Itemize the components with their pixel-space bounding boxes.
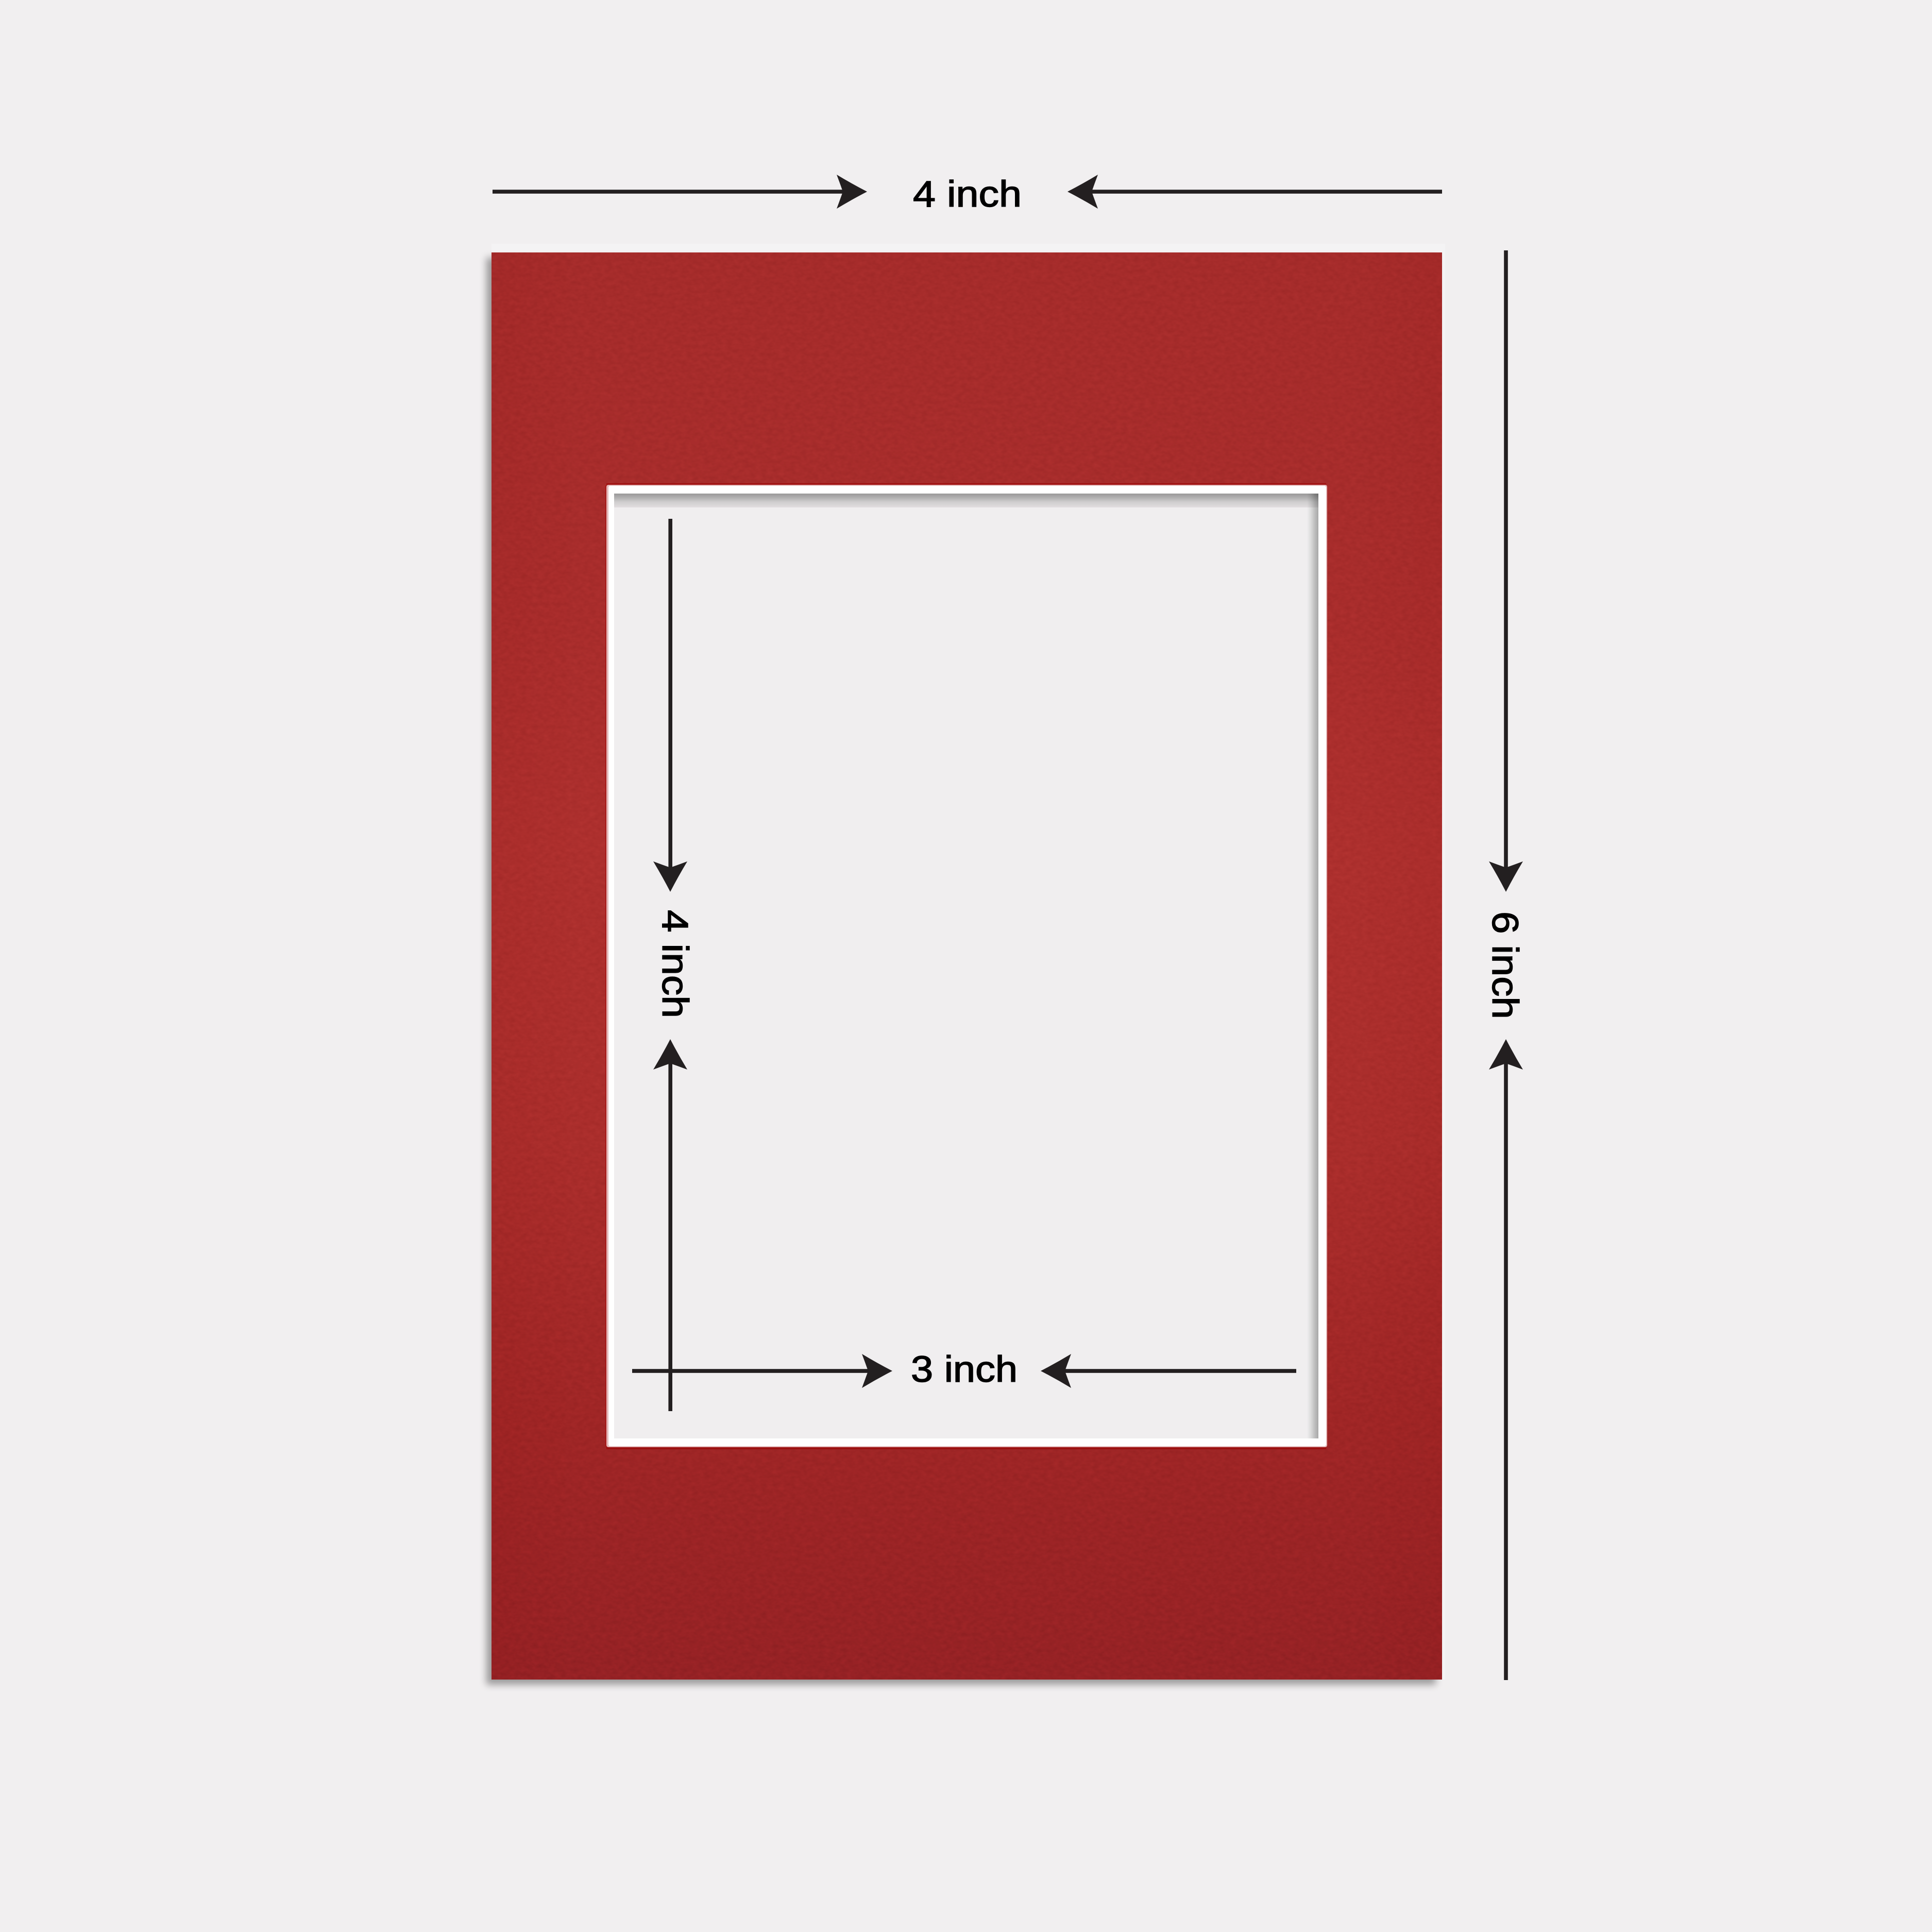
mat edge highlight	[492, 244, 1445, 1680]
arrow: inner pointing left	[1041, 1354, 1296, 1388]
label: right 6 inch: 6 inch	[1484, 911, 1525, 1019]
window top inner shadow	[614, 494, 1318, 507]
arrow: inner pointing right	[632, 1354, 892, 1388]
arrow: right side pointing up	[1489, 1039, 1523, 1680]
window opening	[614, 494, 1318, 1438]
window cut bottom dark edge	[606, 1447, 1326, 1449]
right dimension: 6 inch	[1484, 250, 1525, 1680]
arrow: inner pointing down	[653, 519, 687, 892]
window cut top dark edge	[606, 483, 1326, 485]
arrow: top left pointing right	[493, 175, 867, 209]
arrow: right side pointing down	[1489, 250, 1523, 892]
window white bevel	[608, 486, 1326, 1446]
label: top 4 inch: 4 inch	[913, 174, 1022, 215]
panel: red photo mat	[486, 244, 1445, 1685]
mat drop shadow	[486, 258, 1436, 1685]
window right inner shadow	[1307, 494, 1318, 1438]
window bevel pink edge	[606, 485, 1327, 1447]
mat board	[492, 252, 1442, 1680]
mat paper texture	[492, 252, 1442, 1680]
window cut left dark edge	[605, 485, 607, 1447]
arrow: inner pointing up	[653, 1039, 687, 1411]
inner width dimension: 3 inch	[632, 1349, 1296, 1390]
label: inner 3 inch: 3 inch	[911, 1349, 1018, 1390]
mat side shading	[492, 252, 1442, 1680]
inner height dimension: 4 inch	[653, 519, 695, 1411]
label: inner 4 inch vertical: 4 inch	[654, 910, 695, 1018]
top dimension: 4 inch	[493, 174, 1442, 215]
arrow: top right pointing left	[1067, 175, 1442, 209]
